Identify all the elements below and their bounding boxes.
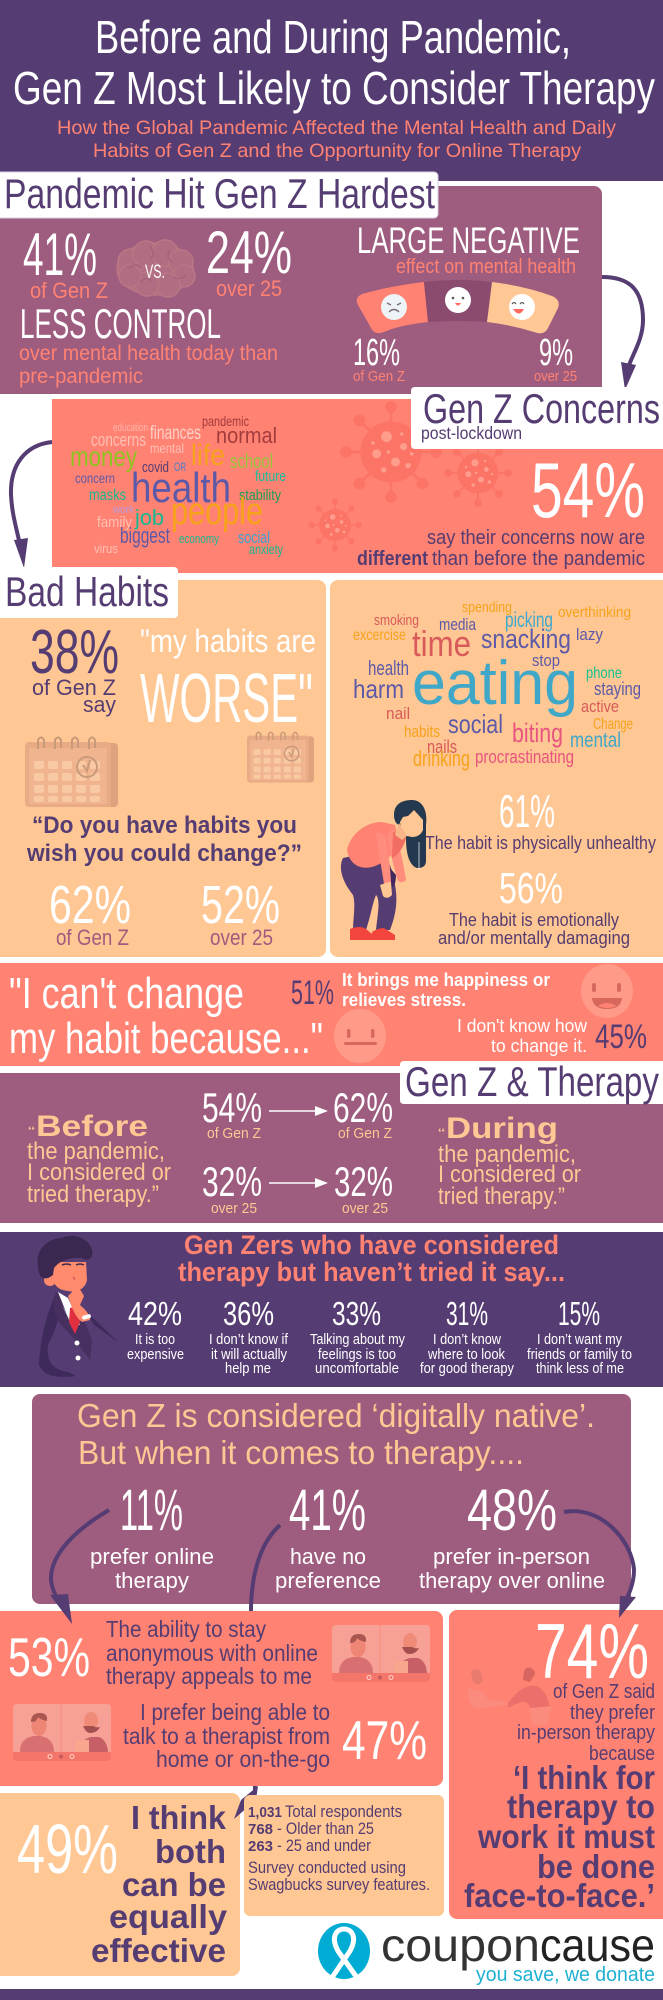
stat: 49%: 49%: [17, 1810, 118, 1888]
quote: both equally effective: [91, 1799, 228, 1969]
respondents list: 263: [248, 1838, 273, 1855]
stat: 15% think less of me: [527, 1295, 632, 1377]
word cloud: habits: [353, 599, 641, 771]
illustration: handshake: [468, 1668, 552, 1725]
quote: both equally effective: effective: [91, 1932, 226, 1969]
quote: during the pandemic: the pandemic,: [438, 1141, 576, 1168]
quote: both equally effective: equally: [109, 1898, 228, 1935]
word cloud: concerns: [70, 413, 286, 557]
word cloud: concerns: covid: [142, 459, 169, 476]
word cloud: concerns: work: [112, 504, 134, 516]
stat: 41% of gen z: of Gen Z: [30, 278, 108, 303]
stat: 36% help me: it will actually: [211, 1346, 287, 1363]
stat: 24% over 25: [206, 219, 292, 301]
stat: 41% no preference: 41%: [289, 1478, 366, 1543]
stat: 56% emotionally damaging: The habit is emotionally: [449, 910, 619, 930]
stat: 54% concerns different: different: [357, 548, 428, 570]
panel: online therapy reasons: [0, 1611, 443, 1786]
word cloud: concerns: masks: [89, 487, 126, 504]
stat: 15% think less of me: think less of me: [536, 1360, 624, 1377]
word cloud: concerns: concern: [75, 470, 115, 486]
quote: must be face-to-face: [464, 1759, 655, 1914]
stat: 61% physically unhealthy: 61%: [499, 785, 555, 837]
logo: couponcause: coupon: [381, 1919, 540, 1971]
stat: 36% help me: [209, 1295, 289, 1377]
stat: 33% uncomfortable: Talking about my: [310, 1331, 405, 1348]
large negative text: effect on mental health: [396, 256, 576, 278]
icon: brain: VS.: [145, 262, 165, 283]
arrow: 11% to online reasons: [50, 1510, 109, 1624]
stat: 47% from home: [123, 1699, 427, 1772]
word cloud: concerns: social: [238, 528, 270, 547]
stat: 33% uncomfortable: 33%: [332, 1295, 381, 1332]
word cloud: habits: excercise: [353, 627, 406, 644]
stat: 62% of gen z: 62%: [49, 875, 131, 935]
panel: gen z and therapy: [0, 1073, 663, 1223]
stat: 42% expensive: [127, 1295, 184, 1363]
stat: 61% physically unhealthy: [425, 785, 656, 853]
icon: virus small: [309, 499, 361, 551]
panel: both equally effective: [0, 1786, 258, 1976]
illustration: woman bent over: [341, 800, 426, 940]
stat: 56% emotionally damaging: and/or mentally damaging: [438, 928, 630, 948]
word cloud: habits: drinking: [413, 746, 470, 771]
title: [13, 11, 655, 114]
stat: 31% where to look: where to look: [427, 1346, 505, 1363]
stat: 36% help me: I don’t know if: [209, 1331, 289, 1348]
word cloud: habits: spending: [462, 599, 512, 616]
heading: gen z concerns: [411, 385, 663, 449]
survey note: Swagbucks survey features.: [248, 1875, 430, 1894]
comparison: over 25: over 25: [211, 1200, 257, 1217]
word cloud: habits: habits: [404, 722, 440, 741]
quote: during the pandemic: [438, 1112, 581, 1210]
quote: my habits are worse: [140, 623, 316, 737]
word cloud: concerns: school: [230, 451, 273, 473]
icon: calendar right: [247, 732, 314, 782]
comparison: over 25: 32%: [202, 1158, 262, 1205]
icon: calendar left: [25, 738, 118, 807]
stat: 45% don't know how: to change it.: [491, 1036, 587, 1056]
arrow: concerns to bad habits: [11, 442, 52, 568]
subtitle: Habits of Gen Z and the Opportunity for Online Therapy: [93, 140, 581, 162]
heading: gen z concerns: post-lockdown: [421, 423, 522, 443]
stat: 31% where to look: 31%: [446, 1295, 488, 1332]
word cloud: concerns: finances: [150, 423, 201, 444]
survey note: Survey conducted using: [248, 1858, 406, 1877]
respondents list: [248, 1802, 402, 1855]
stat: 51% happiness: It brings me happiness or: [342, 970, 550, 990]
stat: 41% of gen z: 41%: [23, 221, 97, 288]
word cloud: habits: overthinking: [558, 604, 631, 621]
logo: couponcause: you save, we donate: [476, 1964, 655, 1986]
stat: 31% where to look: I don’t know: [433, 1331, 501, 1348]
panel: bad habits right: [330, 580, 663, 957]
stat: 38% of gen z say: of Gen Z: [32, 675, 116, 700]
stat: 31% where to look: for good therapy: [420, 1360, 514, 1377]
stat: 9% over 25: over 25: [534, 368, 577, 385]
stat: 41% no preference: [275, 1478, 381, 1593]
word cloud: habits: Change: [593, 716, 633, 733]
quote: during the pandemic: During: [446, 1112, 558, 1145]
stat: 74% of gen z: [517, 1607, 655, 1765]
stat: 16% of gen z: of Gen Z: [353, 368, 405, 385]
comparison: over 25: 32%: [334, 1158, 393, 1205]
word cloud: habits: media: [439, 615, 476, 634]
stat: 47% from home: I prefer being able to: [140, 1699, 330, 1725]
word cloud: habits: harm: [353, 674, 404, 704]
word cloud: habits: nails: [427, 737, 457, 757]
word cloud: concerns: health: [131, 464, 231, 511]
quote: can't change: [9, 969, 323, 1063]
word cloud: concerns: normal: [216, 423, 277, 448]
stat: 41% no preference: have no: [290, 1544, 366, 1569]
stat: 24% over 25: over 25: [216, 276, 282, 301]
stat: 31% where to look: [420, 1295, 514, 1377]
word cloud: concerns: anxiety: [249, 541, 283, 557]
illustration: thinking man: [38, 1236, 118, 1377]
word cloud: habits: stop: [532, 651, 560, 670]
quote: during the pandemic: “: [438, 1125, 445, 1141]
stat: 42% expensive: 42%: [128, 1295, 182, 1332]
quote: must be face-to-face: be done: [537, 1848, 655, 1885]
word cloud: concerns: life: [191, 439, 225, 472]
stat: 53% anonymous: [8, 1616, 318, 1689]
word cloud: habits: eating: [412, 649, 578, 718]
comparison: gen z: of Gen Z: [338, 1125, 392, 1142]
less control text: over mental health today than: [19, 342, 278, 365]
comparison: over 25: [202, 1158, 393, 1217]
question: [26, 812, 302, 867]
word cloud: habits: biting: [512, 718, 563, 748]
comparison: gen z: of Gen Z: [207, 1125, 261, 1142]
stat: 48% prefer in-person: prefer in-person: [433, 1544, 590, 1569]
logo: couponcause: cause: [540, 1919, 655, 1971]
stat: 47% from home: home or on-the-go: [156, 1746, 330, 1772]
quote: my habits are worse: "my habits are: [140, 623, 316, 659]
stat: 47% from home: talk to a therapist from: [123, 1723, 330, 1749]
less control text: LESS CONTROL: [20, 300, 221, 347]
panel: i can't change my habit: [0, 963, 663, 1066]
word cloud: concerns: education: [113, 422, 148, 434]
stat: 54% concerns different: [357, 446, 645, 570]
word cloud: concerns: pandemic: [202, 413, 249, 429]
panel: gen z concerns: [52, 399, 663, 573]
stat: 53% anonymous: 53%: [8, 1626, 90, 1688]
stat: 48% prefer in-person: 48%: [467, 1478, 557, 1543]
panel: pandemic hit gen z hardest: [0, 186, 602, 394]
word cloud: habits: health: [368, 658, 409, 680]
stat: 51% happiness: 51%: [291, 974, 334, 1012]
word cloud: concerns: job: [134, 505, 164, 530]
panel: digitally native: [32, 1394, 631, 1604]
quote: must be face-to-face: therapy to: [507, 1788, 655, 1825]
stat: 53% anonymous: therapy appeals to me: [106, 1663, 312, 1689]
logo: couponcause: [318, 1919, 655, 1986]
word cloud: habits: nail: [386, 704, 410, 723]
word cloud: habits: phone: [586, 665, 622, 682]
subtitle: How the Global Pandemic Affected the Mental Health and Daily: [57, 117, 616, 139]
quote: before the pandemic: [27, 1110, 171, 1208]
stat: 52% over 25: [201, 875, 280, 950]
stat: 54% concerns different: than before the pandemic: [432, 548, 645, 570]
stat: 41% of gen z: [23, 221, 108, 303]
quote: before the pandemic: Before: [36, 1110, 148, 1143]
heading: considered therapy: Gen Zers who have considered: [184, 1230, 559, 1260]
panel: considered therapy but haven't tried: [0, 1230, 663, 1387]
stat: 45% don't know how: 45%: [595, 1018, 647, 1056]
heading: pandemic hit gen z hardest: Pandemic Hit Gen Z Hardest: [4, 170, 435, 217]
quote: during the pandemic: tried therapy.”: [438, 1183, 565, 1210]
heading: considered therapy: [178, 1230, 565, 1287]
stat: 52% over 25: over 25: [210, 925, 273, 950]
stat: 38% of gen z say: say: [83, 692, 116, 717]
stat: 11% prefer online: prefer online: [90, 1544, 214, 1569]
respondents list: 768: [248, 1821, 273, 1838]
quote: can't change: my habit because...": [9, 1014, 323, 1063]
stat: 62% of gen z: [49, 875, 131, 950]
word cloud: concerns: money: [70, 441, 137, 472]
quote: before the pandemic: I considered or: [27, 1159, 171, 1186]
icon: video call top: [332, 1625, 430, 1682]
icon: happy face: [581, 964, 633, 1018]
comparison: over 25: over 25: [342, 1200, 388, 1217]
word cloud: habits: procrastinating: [475, 747, 574, 767]
icon: video call bottom: [13, 1704, 111, 1761]
stat: 11% prefer online: therapy: [115, 1568, 189, 1593]
quote: both equally effective: I think: [131, 1799, 227, 1836]
word cloud: concerns: concerns: [91, 430, 146, 450]
stat: 56% emotionally damaging: 56%: [499, 864, 563, 913]
stat: 54% concerns different: say their concerns now are: [427, 527, 645, 549]
stat: 41% no preference: preference: [275, 1568, 381, 1593]
word cloud: habits: social: [448, 709, 503, 739]
quote: can't change: "I can't change: [9, 969, 244, 1018]
stat: 36% help me: help me: [225, 1360, 271, 1377]
survey note: [248, 1858, 430, 1894]
stat: 36% help me: 36%: [223, 1295, 274, 1332]
stat: 56% emotionally damaging: [438, 864, 630, 948]
heading: digitally native: Gen Z is considered ‘digitally native’.: [77, 1397, 595, 1434]
stat: 52% over 25: 52%: [201, 875, 280, 935]
panel: in-person therapy: [449, 1607, 663, 1919]
word cloud: habits: lazy: [576, 625, 603, 644]
less control text: [19, 300, 278, 388]
word cloud: concerns: biggest: [120, 523, 170, 548]
stat: 38% of gen z say: 38%: [30, 618, 119, 687]
stat: 33% uncomfortable: [310, 1295, 405, 1377]
word cloud: habits: snacking: [481, 624, 571, 654]
stat: 33% uncomfortable: feelings is too: [318, 1346, 396, 1363]
stat: 48% prefer in-person: therapy over online: [419, 1568, 605, 1593]
stat: 45% don't know how: I don't know how: [457, 1016, 588, 1036]
less control text: pre-pandemic: [19, 365, 143, 388]
stat: 42% expensive: It is too: [135, 1331, 175, 1348]
panel: bad habits left: [0, 580, 326, 957]
panel: survey details: [244, 1795, 444, 1916]
icon: neutral face: [334, 1009, 386, 1063]
stat: 15% think less of me: friends or family to: [527, 1346, 632, 1363]
quote: both equally effective: can be: [122, 1866, 226, 1903]
quote: my habits are worse: WORSE": [140, 659, 313, 737]
stat: 47% from home: 47%: [342, 1709, 427, 1771]
word cloud: habits: time: [412, 623, 471, 664]
header band: [0, 0, 663, 181]
stat: 45% don't know how: [457, 1016, 647, 1056]
comparison: gen z: 62%: [333, 1084, 393, 1131]
stat: 42% expensive: expensive: [127, 1346, 184, 1363]
arrow: 48% to in-person: [564, 1511, 636, 1618]
stat: 51% happiness: relieves stress.: [342, 990, 466, 1010]
mood meter: [357, 280, 559, 333]
arrowhead: into 49% panel: [234, 1786, 258, 1819]
stat: 53% anonymous: anonymous with online: [106, 1640, 318, 1666]
heading: bad habits: Bad Habits: [5, 568, 169, 615]
respondents list: - Older than 25: [277, 1819, 374, 1838]
stat: 16% of gen z: [353, 332, 405, 385]
word cloud: concerns: OR: [174, 460, 186, 474]
word cloud: concerns: virus: [94, 541, 118, 556]
word cloud: habits: staying: [594, 679, 641, 699]
comparison: gen z: 54%: [202, 1084, 262, 1131]
stat: 9% over 25: [534, 332, 577, 385]
stat: 9% over 25: 9%: [539, 332, 573, 374]
word cloud: concerns: stability: [239, 487, 281, 504]
stat: 38% of gen z say: [30, 618, 119, 717]
subtitle: [57, 117, 616, 162]
word cloud: concerns: future: [255, 468, 286, 485]
stat: 15% think less of me: I don’t want my: [537, 1331, 622, 1348]
icon: brain: [117, 240, 195, 297]
stat: 62% of gen z: of Gen Z: [56, 925, 129, 950]
stat: 53% anonymous: The ability to stay: [106, 1616, 266, 1642]
stat: 16% of gen z: 16%: [353, 332, 400, 374]
word cloud: habits: mental: [570, 729, 621, 752]
word cloud: habits: active: [581, 697, 619, 716]
quote: both equally effective: both: [155, 1833, 226, 1870]
stat: 74% of gen z: they prefer: [570, 1702, 655, 1724]
arrow: hardest to concerns: [602, 277, 643, 390]
stat: 51% happiness: [291, 970, 550, 1012]
stat: 48% prefer in-person: [419, 1478, 605, 1593]
stat: 15% think less of me: 15%: [558, 1295, 600, 1332]
word cloud: concerns: family: [97, 514, 132, 531]
icon: virus medium: [445, 440, 511, 506]
word cloud: concerns: mental: [150, 440, 184, 456]
stat: 74% of gen z: because: [589, 1743, 655, 1765]
stat: 33% uncomfortable: uncomfortable: [315, 1360, 399, 1377]
stat: 24% over 25: 24%: [206, 219, 292, 286]
footer band: [0, 1989, 663, 2000]
word cloud: concerns: people: [171, 491, 263, 533]
quote: before the pandemic: tried therapy.”: [27, 1181, 159, 1208]
stat: 11% prefer online: [90, 1478, 214, 1593]
quote: before the pandemic: “: [28, 1123, 35, 1139]
comparison: gen z: [202, 1084, 393, 1142]
icon: virus large: [342, 402, 440, 502]
arrow: no preference to 49%: [251, 1525, 280, 1790]
question: “Do you have habits you: [32, 812, 297, 839]
heading: digitally native: [77, 1397, 595, 1471]
respondents list: - 25 and under: [277, 1836, 371, 1855]
heading: considered therapy: therapy but haven’t tried it say...: [178, 1257, 565, 1287]
word cloud: habits: picking: [505, 609, 553, 632]
respondents list: 1,031: [248, 1804, 282, 1821]
stat: 11% prefer online: 11%: [120, 1478, 183, 1543]
respondents list: Total respondents: [285, 1802, 402, 1821]
large negative text: [357, 220, 580, 278]
heading: digitally native: But when it comes to therapy....: [78, 1434, 524, 1471]
word cloud: habits: smoking: [374, 612, 419, 629]
quote: must be face-to-face: face-to-face.’: [464, 1877, 655, 1914]
quote: during the pandemic: I considered or: [438, 1161, 581, 1188]
question: wish you could change?”: [26, 840, 302, 867]
quote: before the pandemic: the pandemic,: [27, 1138, 165, 1165]
word cloud: concerns: economy: [179, 531, 219, 546]
